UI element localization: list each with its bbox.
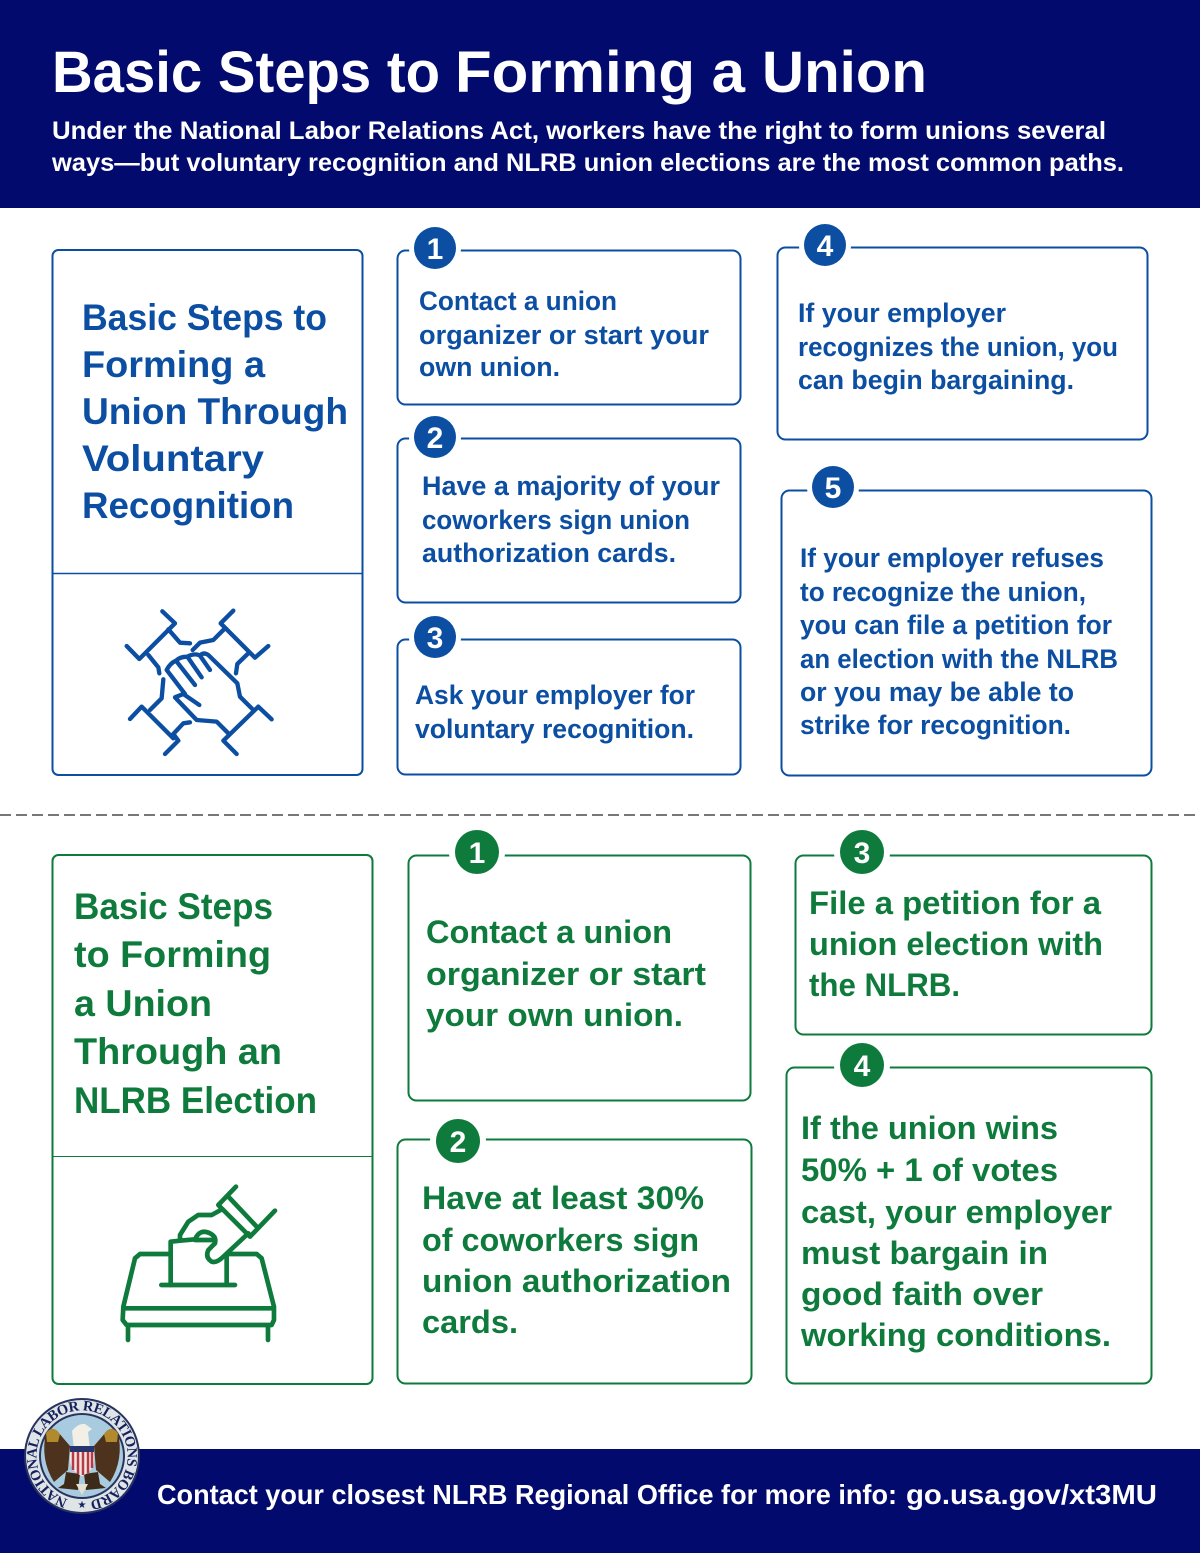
subtitle: Under the National Labor Relations Act, workers have the right to form unions several: [52, 117, 1106, 145]
subtitle: [51, 117, 1124, 177]
step card: voluntary 3: voluntary recognition.: [415, 714, 694, 744]
step card: election 2: union authorization: [422, 1263, 731, 1299]
heading: NLRB election: a Union: [74, 983, 212, 1024]
heading: voluntary recognition: Forming a: [82, 344, 265, 385]
step card: voluntary 5: [782, 461, 1152, 776]
step card: election 4: [786, 1037, 1152, 1384]
step card: voluntary 5: If your employer refuses: [800, 543, 1104, 573]
step card: election 2: [398, 1113, 752, 1384]
title: Forming a: [455, 40, 746, 105]
step card: election 4: cast, your employer: [801, 1194, 1112, 1230]
step card: election 3: 3: [854, 837, 870, 870]
step card: voluntary 2: [398, 411, 740, 602]
step card: voluntary 4: 4: [817, 230, 834, 263]
step card: voluntary 2: 2: [427, 422, 443, 455]
step card: election 3: union election with: [809, 926, 1103, 962]
title: [52, 40, 927, 105]
heading: voluntary recognition: Union Through: [82, 391, 348, 432]
step card: election 4: If the union wins: [801, 1110, 1058, 1146]
step card: election 2: Have at least 30%: [422, 1180, 704, 1216]
step card: voluntary 2: coworkers sign union: [422, 505, 690, 535]
step card: voluntary 1: [398, 222, 740, 404]
panel: NLRB election: [52, 855, 373, 1384]
step card: election 1: Contact a union: [426, 914, 672, 950]
step card: election 1: 1: [469, 837, 485, 870]
logo: NLRB seal: NATIONAL LABOR RELATIONS BOARD: [27, 1400, 138, 1509]
step card: election 3: [796, 824, 1152, 1034]
step card: voluntary 4: can begin bargaining.: [798, 365, 1074, 395]
step card: voluntary 1: own union.: [419, 352, 560, 382]
step card: election 4: good faith over: [801, 1276, 1043, 1312]
step card: voluntary 3: [398, 611, 740, 774]
heading: voluntary recognition: Basic Steps to: [82, 297, 327, 338]
step card: voluntary 5: strike for recognition.: [800, 710, 1071, 740]
footer banner: go.usa.gov/xt3MU: [906, 1479, 1157, 1510]
step card: voluntary 4: [778, 219, 1148, 440]
step card: voluntary 5: or you may be able to: [800, 677, 1074, 707]
step card: voluntary 5: an election with the NLRB: [800, 644, 1118, 674]
panel: voluntary recognition: [52, 250, 362, 775]
step card: election 2: cards.: [422, 1304, 518, 1340]
step card: election 1: your own union.: [426, 997, 683, 1033]
step card: election 2: 2: [450, 1126, 466, 1159]
step card: voluntary 3: 3: [427, 622, 443, 655]
footer banner: [0, 1449, 1200, 1553]
header banner: [0, 0, 1200, 208]
step card: voluntary 3: Ask your employer for: [415, 680, 695, 710]
title: Basic Steps to: [52, 40, 440, 105]
logo: NLRB seal: ★: [78, 1500, 87, 1511]
title: Union: [762, 40, 927, 105]
heading: NLRB election: [74, 886, 317, 1121]
heading: NLRB election: Through an: [74, 1031, 282, 1072]
heading: voluntary recognition: Recognition: [82, 485, 294, 526]
step card: election 3: File a petition for a: [809, 885, 1101, 921]
step card: voluntary 1: 1: [427, 233, 443, 266]
step card: election 2: of coworkers sign: [422, 1222, 699, 1258]
step card: voluntary 2: Have a majority of your: [422, 471, 720, 501]
step card: voluntary 5: 5: [825, 472, 841, 505]
step card: election 1: [408, 824, 750, 1100]
icon: ballot box: [123, 1187, 275, 1340]
step card: election 4: must bargain in: [801, 1235, 1048, 1271]
step card: voluntary 1: organizer or start your: [419, 320, 709, 350]
heading: NLRB election: to Forming: [74, 934, 271, 975]
heading: NLRB election: Basic Steps: [74, 886, 273, 927]
step card: election 3: the NLRB.: [809, 967, 960, 1003]
step card: election 4: working conditions.: [800, 1317, 1111, 1353]
icon: joined hands: [127, 611, 272, 754]
step card: voluntary 5: you can file a petition for: [800, 610, 1112, 640]
step card: election 1: organizer or start: [426, 956, 706, 992]
subtitle: ways—but voluntary recognition and NLRB union elections are the most common paths.: [51, 149, 1124, 177]
step card: voluntary 2: authorization cards.: [422, 538, 676, 568]
step card: voluntary 5: to recognize the union,: [800, 577, 1086, 607]
heading: NLRB election: NLRB Election: [74, 1080, 317, 1121]
heading: voluntary recognition: [82, 297, 348, 526]
step card: voluntary 4: If your employer: [798, 298, 1006, 328]
step card: election 4: 4: [854, 1050, 871, 1083]
step card: election 4: 50% + 1 of votes: [801, 1152, 1058, 1188]
step card: voluntary 1: Contact a union: [419, 286, 617, 316]
heading: voluntary recognition: Voluntary: [82, 438, 264, 479]
step card: voluntary 4: recognizes the union, you: [798, 332, 1118, 362]
footer banner: Contact your closest NLRB Regional Office for more info:: [157, 1479, 897, 1510]
